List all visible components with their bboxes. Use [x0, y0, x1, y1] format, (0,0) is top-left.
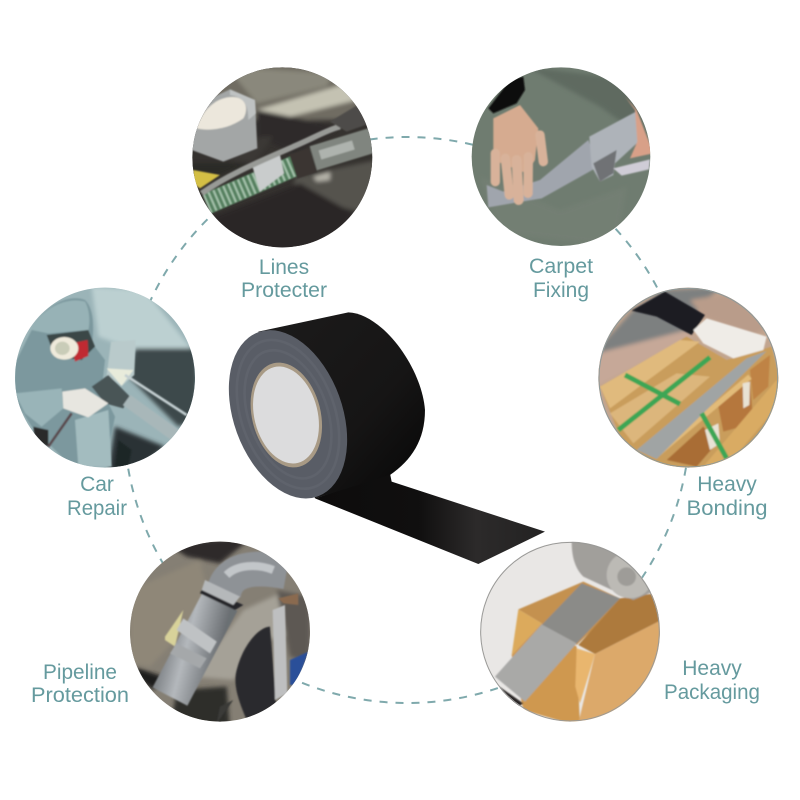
label: car repair	[67, 473, 127, 520]
label: heavy bonding: Heavy	[697, 473, 757, 496]
label: car repair: Car	[80, 473, 114, 496]
photo: pipeline protection	[130, 542, 310, 722]
tape roll	[572, 540, 657, 600]
label: carpet fixing	[529, 255, 593, 302]
label: car repair: Repair	[67, 497, 127, 520]
dashed connecting ring	[124, 137, 690, 703]
roll body	[258, 312, 425, 498]
car trim	[125, 375, 187, 415]
label: lines protecter: Lines	[259, 256, 309, 279]
roll side face	[207, 314, 369, 515]
label: lines protecter	[241, 256, 327, 302]
photo: heavy packaging	[480, 542, 660, 722]
tape roll	[589, 112, 639, 182]
label: pipeline protection	[31, 661, 129, 707]
glove	[62, 388, 108, 417]
label: lines protecter: Protecter	[241, 279, 327, 302]
label: heavy packaging: Heavy	[682, 657, 742, 680]
label: heavy packaging	[664, 657, 760, 704]
photo: heavy bonding	[598, 288, 778, 468]
spray gun cup	[107, 340, 136, 386]
spray gun	[92, 375, 130, 408]
sleeve	[488, 77, 525, 113]
grey tape band	[542, 583, 620, 643]
second hand	[626, 98, 650, 159]
label: heavy bonding	[686, 473, 768, 520]
photo: car repair	[15, 288, 195, 468]
label: carpet fixing: Carpet	[529, 255, 593, 278]
label: pipeline protection: Pipeline	[43, 661, 117, 684]
silver tape	[487, 140, 598, 207]
face mask	[47, 330, 95, 360]
label: carpet fixing: Fixing	[533, 279, 589, 302]
label: heavy bonding: Bonding	[686, 497, 768, 520]
unrolled strip	[315, 473, 545, 564]
label: pipeline protection: Protection	[31, 684, 129, 707]
protective suit	[15, 298, 115, 467]
photo: lines protecter	[192, 67, 372, 248]
roll on engine	[192, 89, 257, 162]
tape roll	[207, 312, 545, 564]
cardboard core	[240, 355, 333, 475]
label: heavy packaging: Packaging	[664, 681, 760, 704]
hand on carpet	[493, 105, 538, 173]
photo: carpet fixing	[472, 67, 650, 246]
